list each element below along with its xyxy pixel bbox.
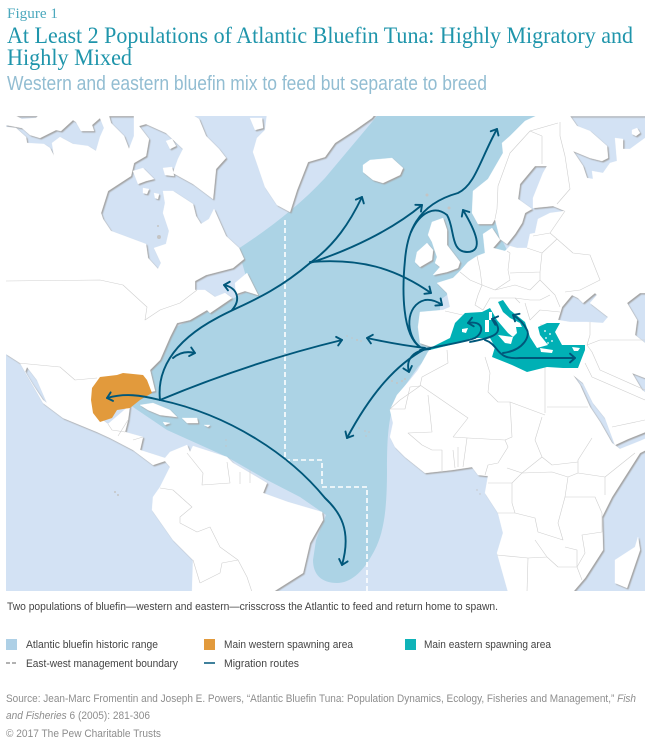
main eastern spawning area bbox=[430, 300, 585, 372]
route: Levant bbox=[485, 340, 575, 358]
route: to Barents Sea bbox=[404, 129, 497, 347]
route: to Gulf of St Lawrence bbox=[224, 285, 237, 310]
route: Balearic bbox=[420, 323, 481, 350]
title: At Least 2 Populations of Atlantic Bluefin Tuna: Highly Migratory and bbox=[7, 23, 633, 48]
bluefin historic range bbox=[130, 116, 540, 583]
route: off US coast bbox=[173, 352, 195, 358]
route: east to Azores bbox=[367, 338, 425, 348]
route: to Greenland waters bbox=[310, 197, 362, 263]
route: to West Africa bbox=[347, 349, 425, 438]
country borders bbox=[6, 122, 645, 592]
small islands bbox=[114, 194, 481, 496]
route: Gulf to North Atlantic bbox=[160, 263, 310, 400]
caption: Two populations of bluefin—western and eastern—crisscross the Atlantic to feed and return home to spawn. bbox=[7, 601, 498, 613]
main western spawning area bbox=[91, 373, 152, 422]
east-west management boundary bbox=[285, 220, 367, 592]
subtitle: Western and eastern bluefin mix to feed but separate to breed bbox=[7, 73, 487, 95]
source note bbox=[6, 693, 636, 722]
route: into western spawning area bbox=[107, 395, 160, 400]
route: to Canary Islands bbox=[408, 349, 430, 372]
route: to Biscay from Gibraltar bbox=[409, 300, 442, 347]
migration routes bbox=[107, 129, 575, 565]
route: west to Azores bbox=[160, 340, 342, 400]
legend: historic range: Atlantic bluefin historic range bbox=[26, 639, 158, 651]
Mediterranean islands bbox=[462, 312, 580, 353]
route: to Norwegian Sea bbox=[310, 205, 422, 263]
copyright: © 2017 The Pew Charitable Trusts bbox=[6, 728, 161, 740]
route: Adriatic bbox=[503, 315, 528, 353]
source note: and Fisheries 6 (2005): 281-306 bbox=[6, 710, 150, 722]
legend: routes: Migration routes bbox=[224, 658, 299, 670]
route: Tyrrhenian bbox=[470, 319, 498, 342]
figure label: Figure 1 bbox=[7, 6, 58, 22]
title: Highly Mixed bbox=[7, 45, 132, 70]
map bbox=[6, 114, 650, 592]
legend: eastern spawning: Main eastern spawning area bbox=[424, 639, 552, 651]
route: to South Atlantic bbox=[160, 400, 346, 565]
title bbox=[7, 23, 633, 70]
legend: boundary: East-west management boundary bbox=[26, 658, 178, 670]
legend bbox=[6, 639, 552, 670]
route: to Bay of Biscay bbox=[310, 261, 431, 293]
land masses bbox=[6, 114, 650, 592]
ocean background bbox=[6, 116, 645, 591]
legend: western spawning: Main western spawning area bbox=[224, 639, 354, 651]
route: North Sea loop bbox=[411, 210, 477, 252]
